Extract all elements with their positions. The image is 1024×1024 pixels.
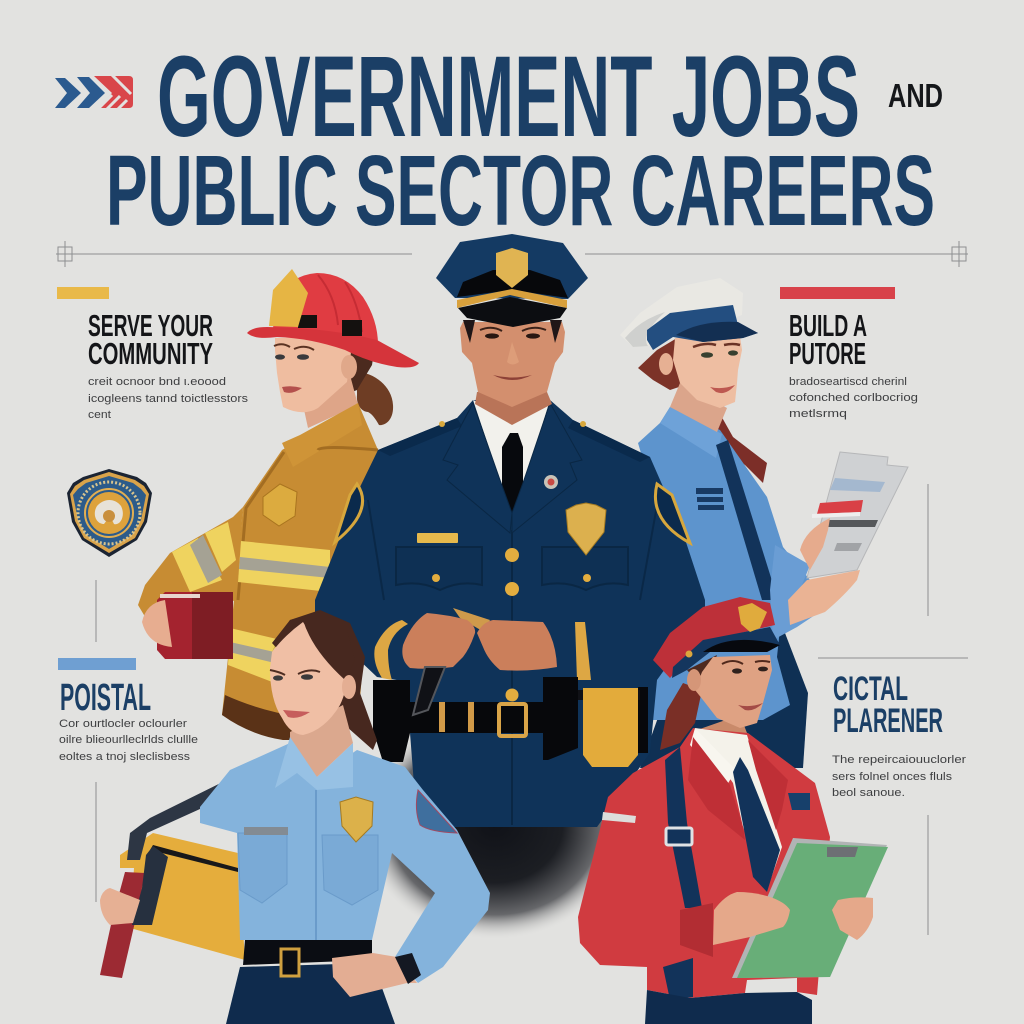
- panel: serve your community: [57, 287, 249, 421]
- icon: chevron arrows: [55, 75, 133, 109]
- panel: cictal planer: [832, 670, 966, 799]
- panel: build a future: BUILD A: [789, 308, 867, 343]
- jacket: [578, 728, 830, 998]
- shirt, tie, lapels: [473, 400, 550, 487]
- figure: firefighter: [138, 269, 419, 740]
- duty belt: [373, 680, 543, 762]
- panel: serve your community: cent: [88, 409, 111, 421]
- patches & badges: [335, 484, 363, 542]
- head: [460, 322, 565, 407]
- panel: cictal planer: CICTAL: [833, 670, 908, 708]
- document: [807, 452, 908, 578]
- hands: [713, 892, 790, 945]
- panel: postal: oilre blieourlleclrlds clullle: [59, 734, 198, 746]
- panel: cictal planer: beol sanoue.: [832, 787, 905, 799]
- figure: postal carrier, bottom left: [100, 610, 490, 1024]
- helmet: [273, 273, 378, 345]
- cap: [653, 597, 775, 678]
- panel: serve your community: SERVE YOUR: [88, 308, 213, 343]
- panel: serve your community: COMMUNITY: [88, 336, 213, 371]
- cap: [620, 278, 743, 347]
- panel: cictal planer: The repeircaiouuclorler: [832, 754, 966, 766]
- figure: postal worker with document: [620, 278, 908, 768]
- word: AND: AND: [888, 77, 943, 114]
- clipboard: [732, 838, 888, 978]
- panel: serve your community: icogleens tannd toictlesstors: [88, 393, 249, 405]
- title: [106, 33, 935, 247]
- hands: [800, 518, 830, 570]
- panel: cictal planer: PLARENER: [833, 702, 943, 740]
- icon: seal badge: [67, 469, 152, 557]
- figure: police officer: [315, 234, 705, 940]
- police cap: [436, 234, 588, 299]
- panel: build a future: PUTORE: [789, 336, 866, 371]
- cuffs: [374, 620, 408, 680]
- panel: build a future: [780, 287, 918, 420]
- panel: build a future: bradoseartiscd cherinl: [789, 376, 907, 388]
- panel: postal: Cor ourtlocler oclourler: [59, 718, 187, 730]
- panel: build a future: metlsrmq: [789, 408, 847, 420]
- panel: build a future: cofonched corlbocriog: [789, 392, 918, 404]
- panel: cictal planer: sers folnel onces fluls: [832, 771, 953, 783]
- shirt: [200, 743, 490, 983]
- panel: postal: [58, 658, 198, 763]
- hands: [453, 608, 490, 632]
- panel: serve your community: creit ocnoor bnd ι.eoood: [88, 376, 226, 388]
- toolbox: [100, 767, 262, 978]
- panel: postal: eoltes a tnoj sleclisbess: [59, 751, 191, 763]
- panel: postal: POISTAL: [60, 677, 151, 719]
- figure: civil planner, bottom right: [578, 597, 888, 1024]
